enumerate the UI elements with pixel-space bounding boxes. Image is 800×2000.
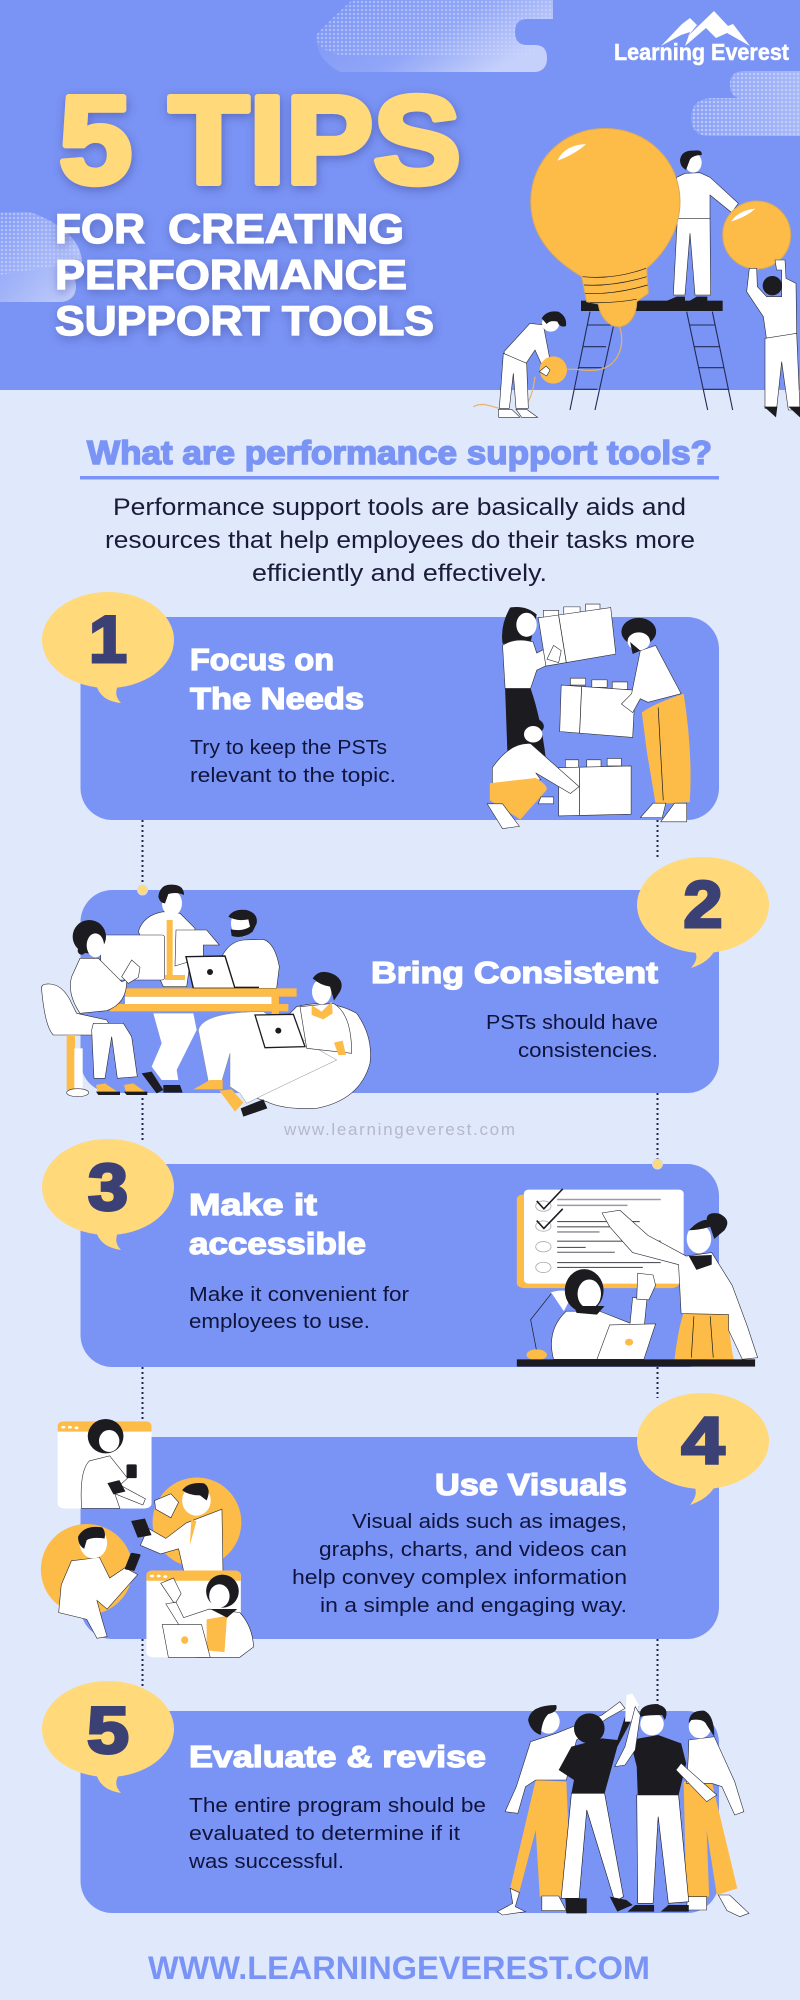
dotted connectors	[142, 820, 658, 1712]
person 4 orange trousers	[684, 1711, 749, 1917]
heading: Use Visuals	[435, 1467, 627, 1502]
body text	[188, 1795, 486, 1873]
cloud: left halftone	[0, 212, 82, 302]
bearded man	[223, 910, 279, 988]
subtitle line 1	[55, 205, 404, 252]
top block	[538, 604, 616, 666]
subtitle line 3: SUPPORT TOOLS	[55, 297, 434, 344]
wire	[473, 327, 622, 408]
connector dot: tip 2 to tip 3	[652, 1159, 662, 1169]
panel: tip 5	[42, 1681, 749, 1917]
card background	[80, 1711, 719, 1913]
bubble with number 4: 4	[682, 1403, 725, 1477]
person on platform	[665, 150, 738, 303]
body text: evaluated to determine if it	[189, 1823, 460, 1845]
circle with man and envelope	[131, 1477, 241, 1571]
heading	[190, 642, 364, 716]
panel: tip 2	[41, 857, 769, 1117]
crouching woman	[487, 718, 579, 829]
body text: Visual aids such as images,	[352, 1511, 627, 1533]
intro paragraph: resources that help employees do their tasks more	[105, 527, 695, 554]
body text: help convey complex information	[292, 1567, 627, 1589]
woman standing with black trousers	[502, 607, 562, 759]
section heading: What are performance support tools?	[87, 434, 712, 471]
heading: Make it	[189, 1187, 317, 1222]
intro paragraph	[105, 494, 695, 587]
bubble with number 5	[42, 1681, 174, 1793]
ladder right	[687, 312, 733, 410]
body text	[292, 1511, 627, 1617]
bubble with number 3	[42, 1139, 174, 1250]
window with woman at laptop	[146, 1570, 254, 1657]
standing presenter	[602, 1210, 758, 1359]
chair	[41, 984, 110, 1097]
checklist board	[517, 1189, 684, 1288]
body text	[189, 1284, 409, 1333]
body text: was successful.	[188, 1851, 344, 1873]
cloud: top halftone	[316, 0, 553, 72]
heading underline	[80, 476, 719, 480]
panel: tip 1	[42, 592, 719, 829]
body text: in a simple and engaging way.	[320, 1595, 627, 1617]
body text: graphs, charts, and videos can	[319, 1539, 627, 1561]
illustration: team high five	[497, 1693, 749, 1917]
person reaching up	[747, 260, 800, 417]
body text	[190, 737, 396, 787]
footer URL: WWW.LEARNINGEVEREST.COM	[148, 1950, 650, 1986]
bubble with number 3: 3	[88, 1150, 128, 1224]
icon: big light bulb	[531, 128, 680, 327]
icon: mountains	[661, 11, 750, 46]
subtitle line 1: FOR	[55, 205, 145, 252]
circle with man and phone	[41, 1524, 141, 1638]
window with woman and phone	[58, 1419, 152, 1508]
illustration: connected people on devices	[41, 1419, 254, 1657]
intro paragraph: efficiently and effectively.	[252, 560, 547, 587]
body text: PSTs should have	[486, 1012, 658, 1034]
body text	[486, 1012, 658, 1062]
illustration: people stacking blocks	[487, 604, 691, 829]
heading: Bring Consistent	[371, 955, 658, 990]
card background	[80, 1164, 719, 1367]
body text: employees to use.	[189, 1311, 370, 1333]
title	[55, 71, 461, 344]
title: 5 TIPS: 5 TIPS	[59, 71, 461, 210]
cloud: right halftone	[691, 71, 800, 136]
subtitle line 2: PERFORMANCE	[55, 251, 407, 298]
bubble with number 2: 2	[684, 867, 722, 941]
heading: accessible	[189, 1226, 366, 1261]
heading: Focus on	[190, 642, 334, 677]
bubble with number 2	[637, 857, 769, 968]
platform	[581, 301, 723, 311]
body text: Try to keep the PSTs	[190, 737, 387, 759]
intro paragraph: Performance support tools are basically aids and	[113, 494, 686, 521]
ladder left	[570, 312, 613, 410]
watermark: www.learningeverest.com	[283, 1120, 515, 1139]
person 2 black top	[559, 1693, 639, 1913]
small bulb held up	[723, 201, 791, 269]
illustration: team at desk	[41, 885, 371, 1117]
body text: Make it convenient for	[189, 1284, 409, 1306]
person bending with balloon	[498, 311, 567, 417]
heading: The Needs	[190, 681, 364, 716]
bubble with number 5: 5	[87, 1693, 129, 1767]
lamp	[527, 1290, 574, 1360]
subtitle line 1: CREATING	[168, 205, 404, 252]
bubble with number 1	[42, 592, 174, 703]
middle block	[560, 678, 635, 737]
body text: relevant to the topic.	[190, 765, 396, 787]
standing man	[138, 885, 197, 1093]
heading: Evaluate & revise	[189, 1739, 486, 1774]
person 3 black top	[615, 1704, 717, 1912]
body text: The entire program should be	[189, 1795, 486, 1817]
beanbag person	[193, 972, 371, 1117]
card background	[80, 617, 719, 820]
table	[110, 988, 297, 1017]
illustration: team building a light bulb	[473, 128, 800, 417]
bubble with number 1: 1	[89, 602, 127, 676]
person 1 orange trousers	[497, 1702, 625, 1915]
logo wordmark: Learning Everest	[614, 39, 789, 65]
heading	[189, 1187, 366, 1261]
card background	[80, 1437, 719, 1639]
panel: tip 3	[42, 1139, 758, 1367]
desk	[517, 1359, 755, 1367]
body text: consistencies.	[518, 1040, 658, 1062]
card background	[80, 890, 719, 1093]
seated woman	[551, 1269, 656, 1359]
bottom block	[559, 758, 631, 816]
illustration: checklist presentation	[517, 1189, 758, 1367]
monitor	[101, 935, 165, 980]
paper	[175, 930, 219, 966]
seated woman	[70, 920, 147, 1095]
logo: Learning Everest	[614, 11, 789, 65]
header panel	[0, 0, 800, 390]
panel: tip 4	[41, 1393, 769, 1657]
bubble with number 4	[637, 1393, 769, 1505]
connector dot: tip 1 to tip 2	[138, 885, 148, 895]
laptop	[186, 956, 259, 989]
woman in orange trousers	[621, 618, 691, 822]
